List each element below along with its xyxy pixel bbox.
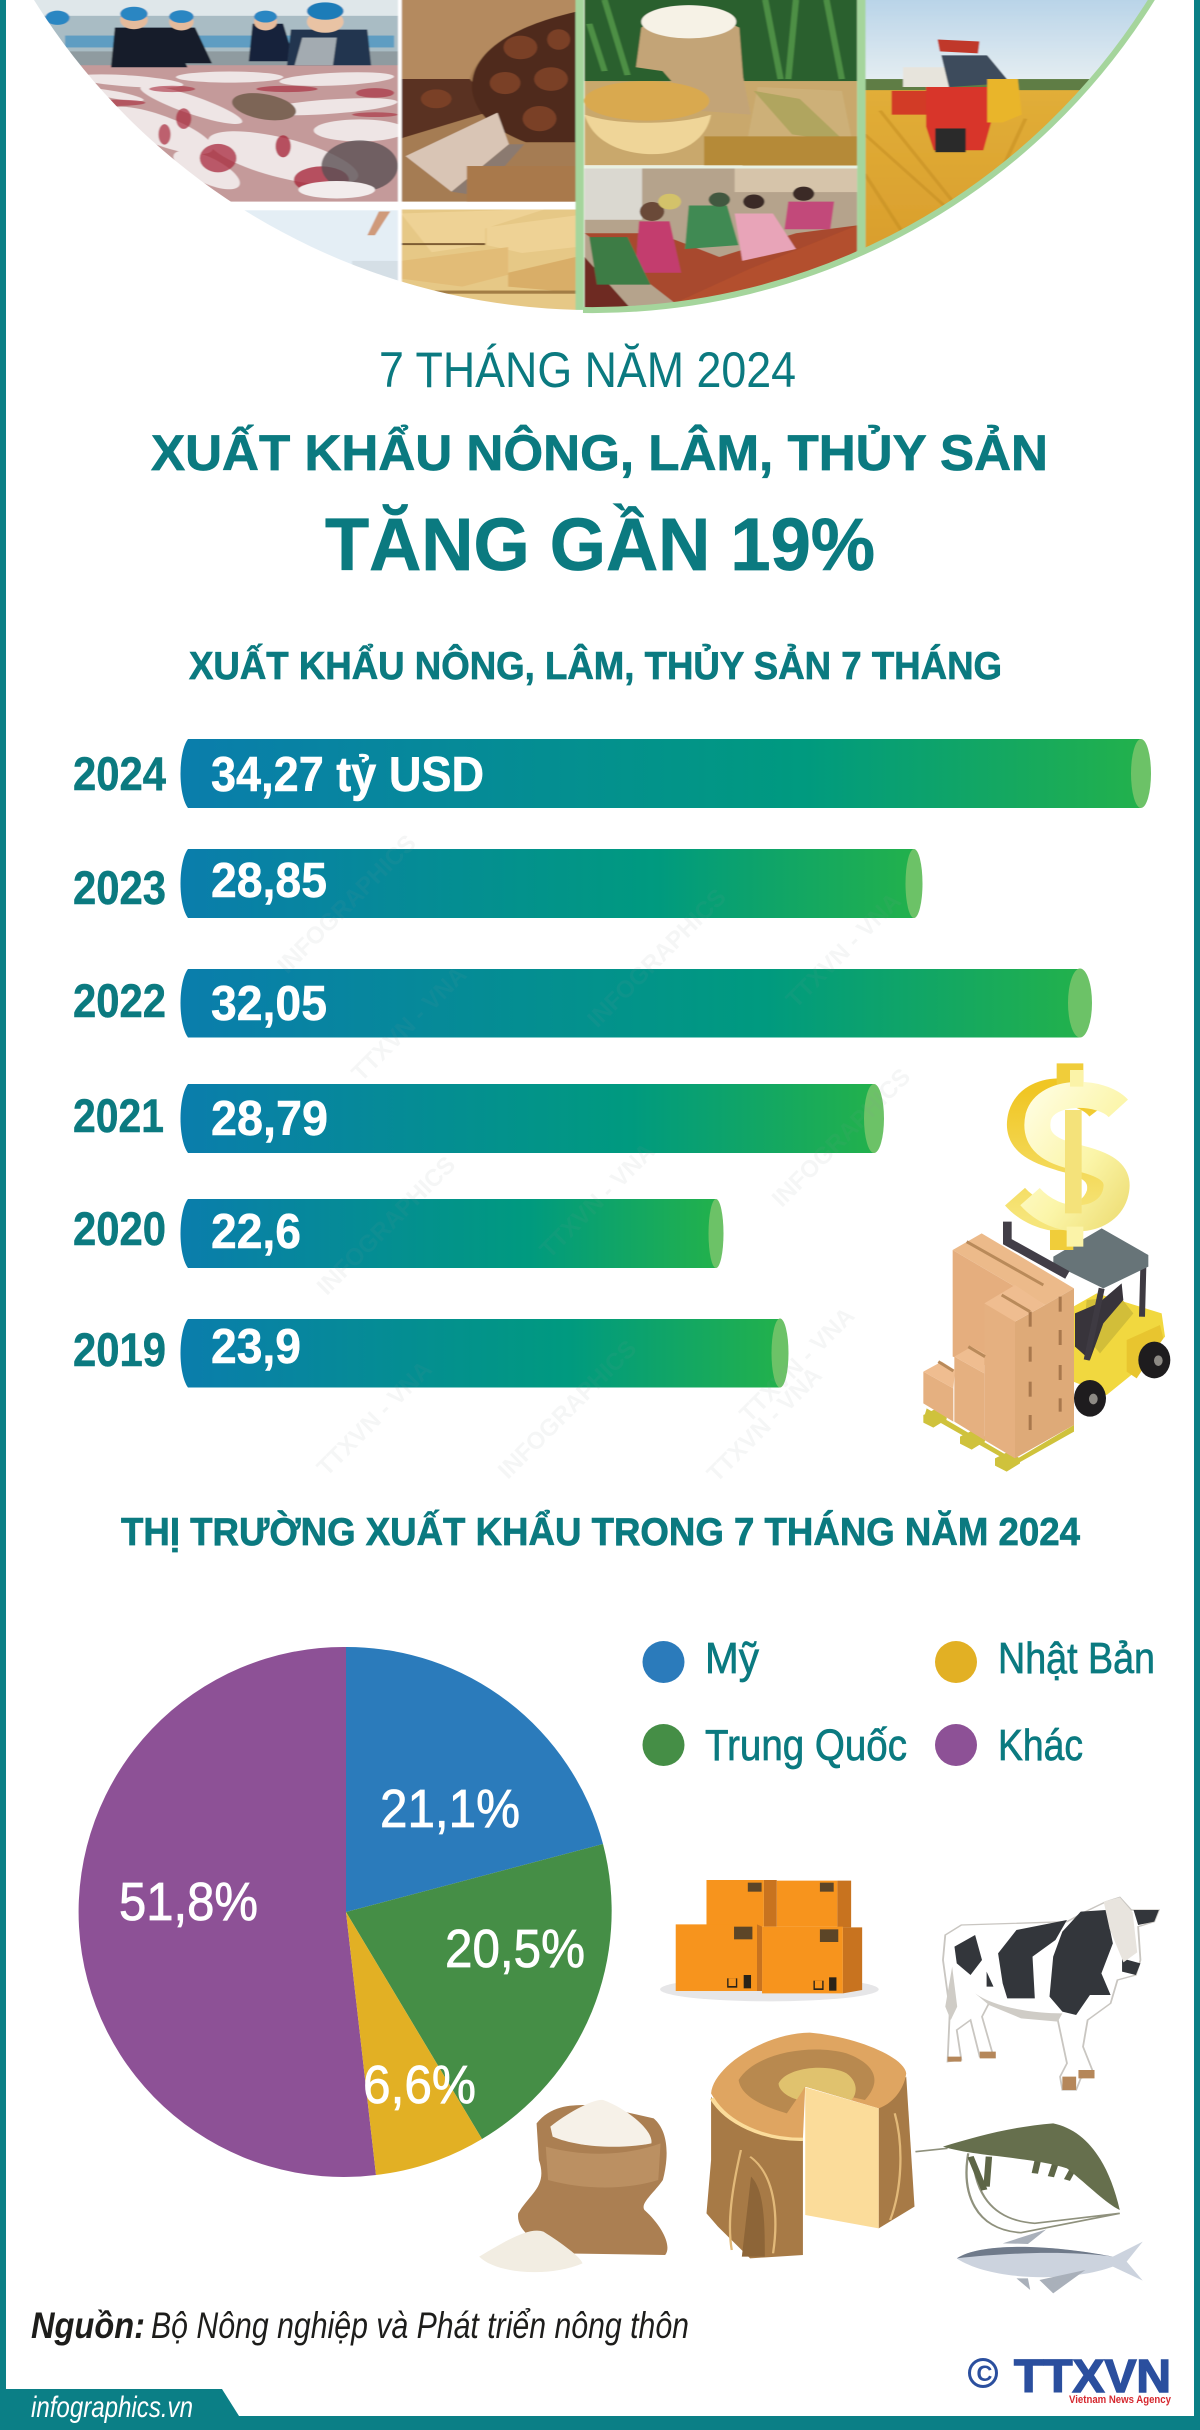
title: period: 7 THÁNG NĂM 2024	[379, 342, 796, 398]
title: main line: XUẤT KHẨU NÔNG, LÂM, THỦY SẢN	[151, 424, 1048, 481]
legend: Mỹ	[705, 1634, 759, 1683]
watermarks: TTXVN - VNA	[702, 1362, 827, 1488]
illustration: forklift with boxes and dollar sign	[923, 1063, 1170, 1472]
photo: fish processing factory	[0, 0, 406, 202]
watermarks	[272, 830, 916, 1488]
logo: TTXVN: C	[976, 2361, 992, 2386]
watermarks: TTXVN - VNA	[781, 888, 907, 1013]
source line: Nguồn:	[31, 2305, 145, 2346]
cardboard boxes	[923, 1233, 1074, 1458]
photo: coffee beans	[401, 0, 576, 202]
legend: Khác	[998, 1721, 1083, 1770]
watermarks: INFOGRAPHICS	[767, 1063, 916, 1213]
legend	[642, 1634, 1155, 1770]
photo dividers in light green	[576, 0, 866, 316]
illustrations: export goods	[479, 1880, 1159, 2293]
value labels: 6,6%	[363, 2055, 476, 2115]
bar 2023: 2023	[73, 861, 166, 914]
bar 2024: 2024	[73, 747, 166, 800]
heading: market share: THỊ TRƯỜNG XUẤT KHẨU TRONG 7 THÁNG NĂM 2024	[121, 1509, 1080, 1554]
footer bar with website tab	[0, 2389, 1200, 2430]
bar 2020: 2020	[73, 1202, 166, 1255]
icon: pangasius fish	[957, 2229, 1143, 2293]
watermarks: TTXVN - VNA	[734, 1302, 860, 1428]
icon: dairy cow	[943, 1897, 1159, 2090]
watermarks: INFOGRAPHICS	[493, 1335, 642, 1484]
watermarks: INFOGRAPHICS	[272, 830, 422, 979]
bar 2021: 28,79	[211, 1092, 328, 1146]
footer bar with website tab: infographics.vn	[31, 2391, 193, 2424]
pie chart: markets	[79, 1647, 612, 2177]
slice: Mỹ	[346, 1647, 603, 1912]
photo: rice harvester in field	[865, 0, 1200, 253]
watermarks: TTXVN - VNA	[347, 961, 472, 1087]
photo: wood planks	[401, 209, 576, 315]
bar 2023	[73, 849, 922, 918]
bar chart: exports by year	[73, 739, 1151, 1388]
value labels: 20,5%	[445, 1919, 585, 1979]
icon: cardboard boxes	[660, 1880, 879, 2001]
bar 2019: 2019	[73, 1323, 166, 1376]
value labels: 21,1%	[380, 1779, 520, 1839]
bar 2019	[73, 1318, 788, 1388]
slice: Nhật Bản	[346, 1912, 482, 2175]
bar 2024: 34,27 tỷ USD	[211, 748, 484, 802]
heading: bar chart: XUẤT KHẨU NÔNG, LÂM, THỦY SẢN 7 THÁNG	[189, 643, 1002, 688]
bar 2022	[73, 968, 1092, 1038]
value labels: 51,8%	[119, 1872, 258, 1932]
photo collage semicircle	[0, 0, 1200, 317]
pallet	[923, 1408, 1074, 1472]
legend: Trung Quốc	[705, 1721, 907, 1770]
watermarks: TTXVN - VNA	[312, 1356, 437, 1482]
bar 2024	[73, 739, 1151, 808]
slice: Khác	[79, 1647, 376, 2177]
source line: Bộ Nông nghiệp và Phát triển nông thôn	[151, 2305, 689, 2346]
bar 2019: 23,9	[211, 1320, 301, 1374]
slice: Trung Quốc	[346, 1844, 612, 2139]
photo: lychee harvest workers	[585, 168, 857, 311]
legend: Nhật Bản	[998, 1634, 1155, 1683]
logo: TTXVN: TTXVN	[1014, 2350, 1171, 2402]
watermarks: INFOGRAPHICS	[582, 884, 732, 1033]
photo separators	[396, 0, 576, 282]
bar 2020	[73, 1199, 724, 1268]
icon: tree stump	[706, 2033, 915, 2258]
icon: dollar sign	[1015, 1063, 1118, 1250]
logo: TTXVN: Vietnam News Agency	[1069, 2394, 1172, 2406]
bar 2022: 2022	[73, 974, 166, 1027]
logo: TTXVN	[970, 2350, 1172, 2406]
forklift body	[1007, 1222, 1170, 1417]
value labels	[119, 1779, 585, 2115]
watermarks: INFOGRAPHICS	[312, 1151, 461, 1301]
bar 2021	[73, 1084, 884, 1153]
watermarks: TTXVN - VNA	[535, 1138, 660, 1264]
bar 2023: 28,85	[211, 854, 327, 908]
bar 2020: 22,6	[211, 1205, 301, 1259]
photo: rice sack and bowl	[584, 0, 857, 166]
bar 2021: 2021	[73, 1089, 164, 1142]
bar 2022: 32,05	[211, 977, 327, 1031]
icon: shrimp	[915, 2123, 1120, 2233]
photo: pale shop interior	[0, 210, 398, 317]
title: growth figure: TĂNG GẦN 19%	[325, 503, 875, 586]
photo collage arc outline	[583, 0, 1155, 310]
icon: rice sack	[479, 2100, 667, 2272]
